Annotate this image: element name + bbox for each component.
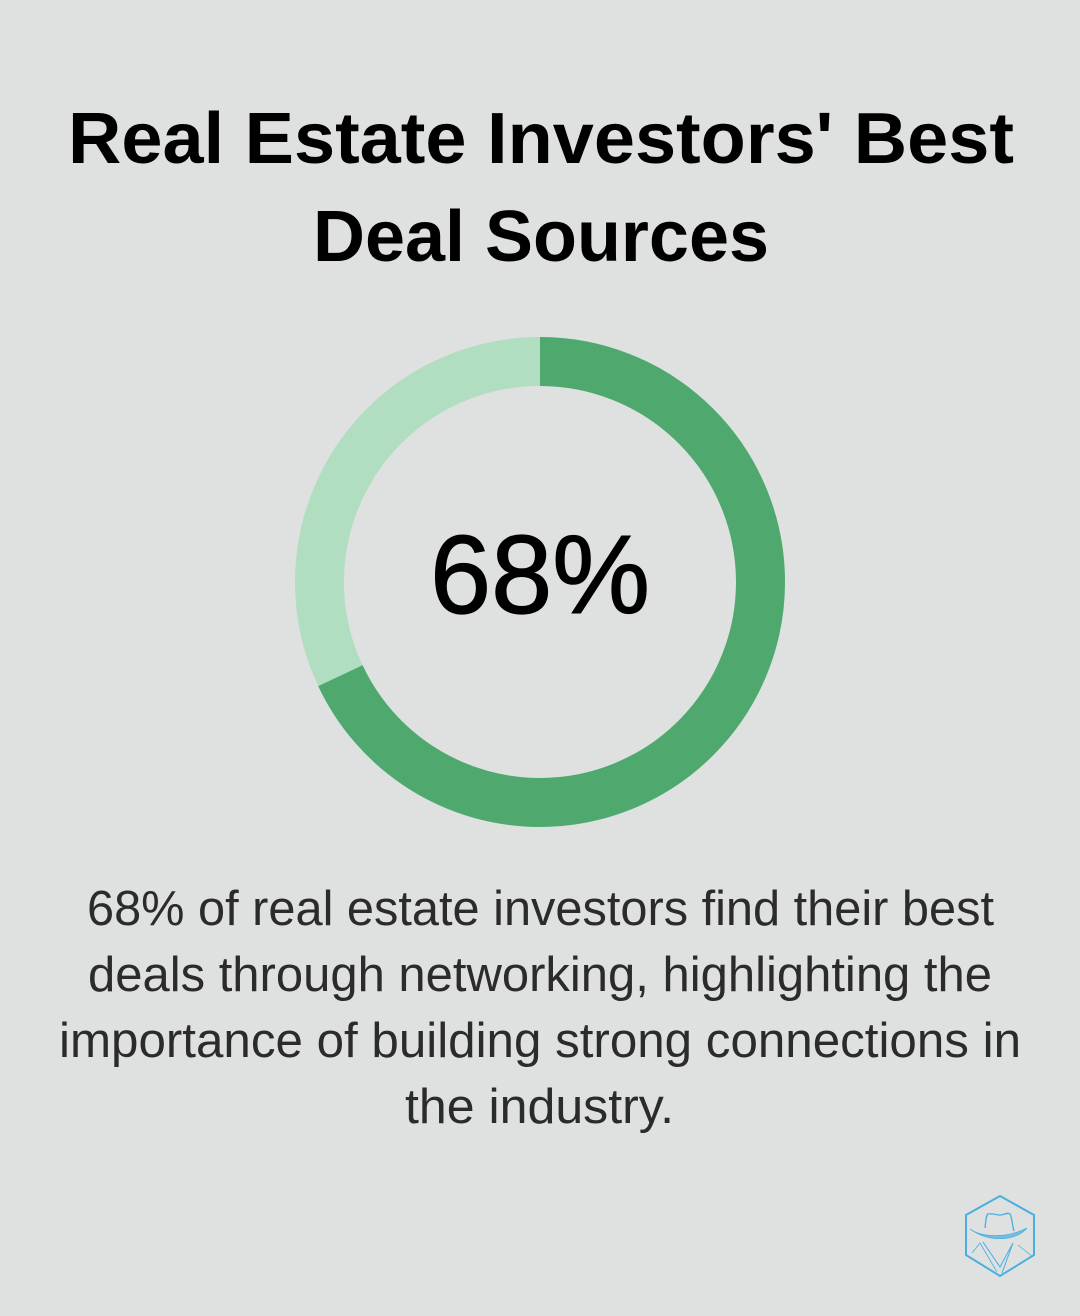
description text: 68% of real estate investors find their best xyxy=(87,882,994,936)
title: Real Estate Investors' Best xyxy=(68,99,1014,179)
description text xyxy=(59,882,1021,1134)
donut value: 68% xyxy=(430,513,650,637)
title xyxy=(68,99,1014,277)
description text: importance of building strong connections in xyxy=(59,1014,1021,1068)
title: Deal Sources xyxy=(313,197,769,277)
icon: spy logo xyxy=(966,1196,1034,1276)
donut chart: 68% xyxy=(320,362,760,802)
description text: deals through networking, highlighting the xyxy=(88,948,992,1002)
description text: the industry. xyxy=(405,1080,674,1134)
